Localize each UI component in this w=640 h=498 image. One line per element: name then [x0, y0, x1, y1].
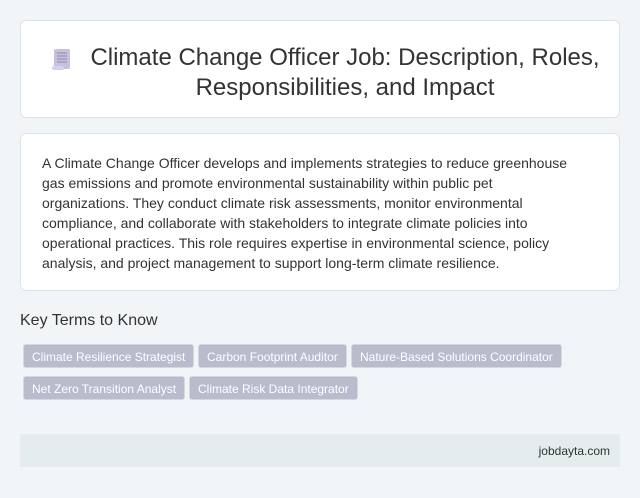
footer: jobdayta.com — [539, 444, 610, 458]
tags: Climate Resilience Strategist — [32, 350, 185, 364]
description card — [20, 133, 620, 291]
tags: Carbon Footprint Auditor — [207, 350, 338, 364]
key terms heading: Key Terms to Know — [20, 312, 158, 329]
tags: Net Zero Transition Analyst — [32, 382, 176, 396]
title: Climate Change Officer Job: Description, Roles, Responsibilities, and Impact — [90, 44, 600, 101]
icon: document — [52, 49, 70, 70]
tags: Climate Risk Data Integrator — [198, 382, 349, 396]
header card — [20, 20, 620, 118]
description text: A Climate Change Officer develops and implements strategies to reduce greenhouse gas emissions and promote environmental sustainability within public pet organizations. They conduct climate risk assessments, monitor environmental compliance, and collaborate with stakeholders to integrate climate policies into operational practices. This role requires expertise in environmental science, policy analysis, and project management to support long-term climate resilience. — [42, 155, 567, 271]
tags: Nature-Based Solutions Coordinator — [360, 350, 553, 364]
footer — [20, 434, 620, 467]
